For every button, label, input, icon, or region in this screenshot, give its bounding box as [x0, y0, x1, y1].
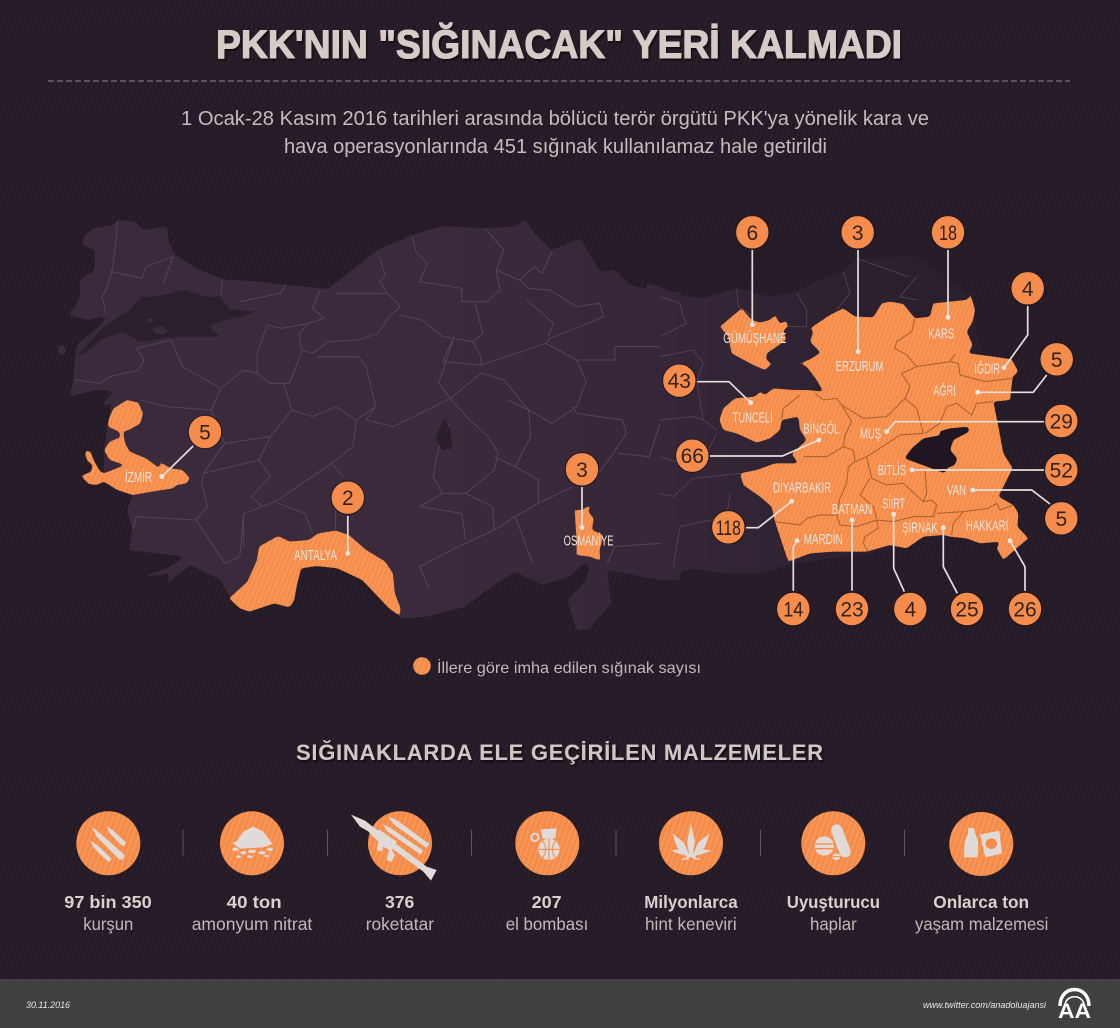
callout: Mardin: 14: [783, 598, 804, 622]
callout: Kars: KARS: [928, 327, 954, 343]
callout: Bitlis: 52: [1050, 460, 1073, 482]
subtitle: hava operasyonlarında 451 sığınak kullanılamaz hale getirildi: [284, 136, 827, 158]
callout: Bingöl: [676, 419, 839, 472]
icon: pills: [814, 830, 845, 860]
callout: Mardin: [777, 530, 843, 626]
callout: Ağrı: 5: [1051, 349, 1063, 372]
icon: powder pile: [232, 827, 273, 858]
Marmara islands: [145, 318, 169, 335]
Sea of Marmara and Dardanelles: [76, 290, 257, 357]
callout: Bitlis: [878, 453, 1078, 487]
item: kurşun: [64, 811, 152, 934]
twitter url: www.twitter.com/anadoluajansi: [923, 1000, 1047, 1011]
item: yaşam malzemesi: yaşam malzemesi: [915, 914, 1048, 934]
province borders: west: [75, 221, 917, 590]
icon: cannabis leaf: [671, 824, 712, 860]
callout: Şırnak: [902, 520, 984, 626]
icon: grenade: [531, 828, 560, 860]
section heading: SIĞINAKLARDA ELE GEÇİRİLEN MALZEMELER: [296, 740, 823, 765]
icon: bottle and food package: [964, 828, 1002, 857]
callout: Erzurum: ERZURUM: [836, 359, 883, 375]
callout: Batman: 23: [840, 598, 864, 622]
callout: Antalya: [294, 481, 364, 564]
item: amonyum nitrat: 40 ton: [227, 892, 282, 912]
callout: Kars: 18: [939, 222, 957, 245]
Lake Tuz: [436, 418, 452, 451]
item: haplar: [787, 811, 880, 934]
callout: Hakkari: 26: [1013, 598, 1037, 622]
item: haplar: Uyuşturucu: [787, 892, 880, 912]
callout: Bingöl: 66: [681, 445, 704, 468]
callout: Ağrı: [933, 343, 1073, 399]
base land: [58, 220, 993, 630]
subtitle: 1 Ocak-28 Kasım 2016 tarihleri arasında bölücü terör örgütü PKK'ya yönelik kara ve: [181, 108, 929, 130]
callout: Tunceli: TUNCELİ: [733, 408, 773, 426]
callout: Şırnak: ŞIRNAK: [902, 520, 938, 536]
title: PKK'NIN "SIĞINACAK" YERİ KALMADI: [216, 21, 902, 67]
Lake Van: [904, 427, 969, 473]
callout: Tunceli: 43: [668, 370, 691, 393]
item: hint keneviri: hint keneviri: [645, 914, 737, 934]
logo: Anadolu Agency: AA: [1058, 1000, 1091, 1023]
item: roketatar: [351, 811, 437, 934]
callout: Ağrı: AĞRI: [933, 382, 956, 399]
item: amonyum nitrat: amonyum nitrat: [192, 914, 312, 934]
item: roketatar: 376: [385, 892, 415, 912]
item: roketatar: roketatar: [366, 914, 434, 934]
callout: Bingöl: BİNGÖL: [803, 419, 839, 437]
callout: Van: [947, 483, 1078, 535]
item: el bombası: 207: [532, 892, 562, 912]
callout: Siirt: SİİRT: [882, 494, 905, 512]
callout: Iğdır: [974, 272, 1044, 378]
legend: İllere göre imha edilen sığınak sayısı: [437, 658, 701, 677]
callout: Gümüşhane: 6: [746, 222, 758, 245]
callout: Van: VAN: [947, 483, 966, 499]
item: kurşun: 97 bin 350: [64, 892, 152, 912]
item: yaşam malzemesi: Onlarca ton: [933, 892, 1029, 912]
callout: Diyarbakır: 118: [716, 517, 741, 540]
footer bar: [0, 979, 1120, 1028]
item: hint keneviri: [644, 811, 738, 934]
callout: Siirt: 4: [904, 598, 916, 622]
callout: İzmir: 5: [199, 422, 211, 444]
callout: Osmaniye: 3: [576, 459, 588, 482]
callout: Hakkari: [966, 517, 1042, 626]
date: 30.11.2016: [26, 1000, 71, 1011]
item: yaşam malzemesi: [915, 812, 1048, 934]
callout: Diyarbakır: [712, 479, 831, 544]
icon: rocket launcher: [351, 815, 437, 881]
item: el bombası: el bombası: [506, 914, 588, 934]
callout: Gümüşhane: [723, 216, 787, 347]
callout: Iğdır: IĞDIR: [974, 361, 1000, 378]
callout: Hakkari: HAKKARİ: [966, 517, 1008, 535]
province borders: highlighted: [775, 318, 1013, 552]
callout: Gümüşhane: GÜMÜŞHANE: [723, 329, 787, 347]
callout: Antalya: ANTALYA: [294, 548, 337, 564]
callout: Osmaniye: [564, 453, 614, 550]
dividers: [182, 830, 905, 856]
map of Turkey: [58, 220, 1028, 630]
subtitle: [181, 108, 929, 158]
item: kurşun: kurşun: [83, 914, 133, 934]
callout: Osmaniye: OSMANİYE: [564, 532, 614, 550]
callout: Tunceli: [663, 364, 773, 426]
item: haplar: haplar: [810, 914, 857, 934]
callout: Bitlis: BİTLİS: [878, 461, 906, 479]
callout: Muş: 29: [1050, 410, 1073, 434]
logo: Anadolu Agency: [1058, 990, 1091, 1023]
callout: İzmir: [125, 415, 222, 486]
callout: Muş: [860, 404, 1078, 442]
callout: Batman: BATMAN: [832, 502, 872, 518]
item: el bombası: [506, 811, 588, 934]
callout: Kars: [928, 216, 965, 343]
callout: Diyarbakır: DİYARBAKIR: [773, 479, 831, 497]
callout: Şırnak: 25: [955, 598, 979, 622]
callout: Iğdır: 4: [1022, 278, 1034, 301]
callout: İzmir: İZMİR: [125, 468, 152, 486]
item: hint keneviri: Milyonlarca: [644, 892, 738, 912]
callout: Van: 5: [1055, 508, 1067, 531]
callout: Batman: [832, 502, 872, 626]
callout: Antalya: 2: [342, 487, 354, 510]
item: amonyum nitrat: [192, 811, 312, 934]
icon: bullets: [90, 826, 126, 862]
callout: Erzurum: [836, 216, 883, 375]
callout: Siirt: [882, 494, 927, 626]
callout: Mardin: MARDİN: [804, 530, 843, 548]
highlighted provinces: [81, 295, 1028, 616]
callout: Muş: MUŞ: [860, 426, 881, 442]
callout: Erzurum: 3: [852, 222, 864, 245]
